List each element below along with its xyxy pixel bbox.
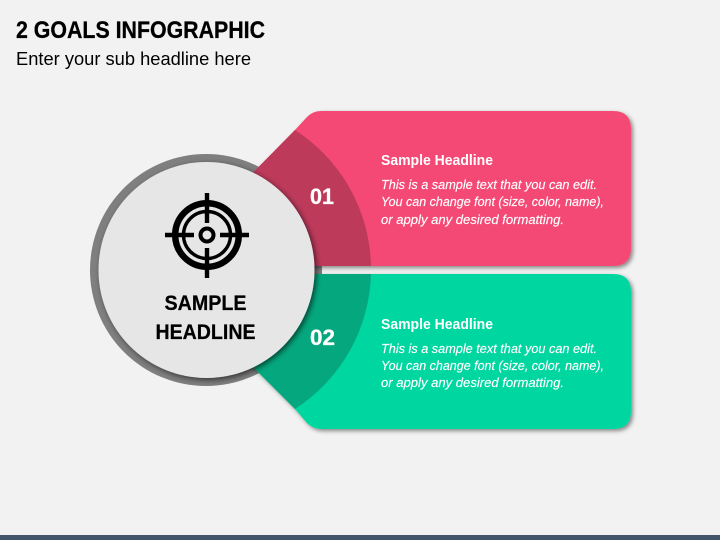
card body text: This is a sample text that you can edit. (381, 341, 597, 356)
circle headline: HEADLINE (156, 321, 256, 344)
card headline: Sample Headline (381, 317, 493, 333)
title: 2 GOALS INFOGRAPHIC (16, 17, 265, 44)
icon: target crosshair (165, 193, 249, 278)
circle headline (156, 292, 256, 344)
card body text: This is a sample text that you can edit. (381, 177, 597, 192)
panel: goal 02 (230, 274, 631, 429)
card body text: or apply any desired formatting. (381, 375, 564, 390)
circle headline: SAMPLE (164, 292, 246, 315)
outer grey ring of circle (90, 154, 322, 386)
subtitle: Enter your sub headline here (16, 49, 251, 69)
card body text (381, 341, 604, 390)
card body text: or apply any desired formatting. (381, 212, 564, 227)
card: green shape (230, 274, 631, 429)
card body text: You can change font (size, color, name), (381, 194, 604, 209)
card: pink shape (230, 111, 631, 266)
footer bar (0, 535, 720, 540)
number 02: 02 (310, 325, 335, 350)
central circle (98, 162, 314, 378)
number 01: 01 (310, 184, 334, 209)
card body text: You can change font (size, color, name), (381, 358, 604, 373)
card headline: Sample Headline (381, 153, 493, 169)
dark arc band (230, 274, 371, 409)
panel: goal 01 (230, 111, 631, 266)
card body text (381, 177, 604, 227)
dark arc band (230, 130, 371, 266)
